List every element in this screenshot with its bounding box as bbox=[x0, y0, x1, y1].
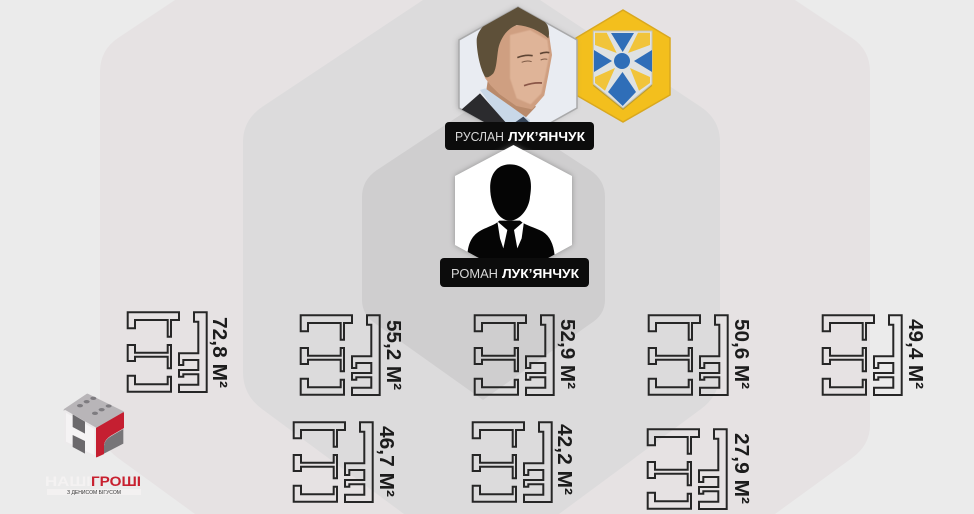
portrait: Ruslan Lukianchuk bbox=[455, 6, 578, 122]
apartment: 55,2 m2 bbox=[301, 315, 404, 395]
shield bbox=[593, 31, 652, 110]
brows and mouth bbox=[517, 52, 549, 58]
jacket bbox=[462, 93, 506, 122]
apartment: 72,8 m2 bbox=[128, 312, 230, 392]
apartment: 46,7 m2: 46,7 М² bbox=[375, 426, 397, 497]
logo subtitle band bbox=[47, 489, 141, 495]
tie bbox=[515, 117, 529, 122]
face bbox=[481, 26, 551, 108]
apartment: 49,4 m2 bbox=[823, 315, 926, 395]
apartment: 49,4 m2: 49,4 М² bbox=[904, 319, 926, 389]
logo: Nashi Groshi: ГРОШІ bbox=[91, 473, 141, 489]
logo wordmark: НАШІ bbox=[45, 473, 91, 489]
logo cube bbox=[65, 395, 123, 457]
shirt bbox=[480, 88, 530, 125]
apartment: 55,2 m2: 55,2 М² bbox=[382, 320, 404, 390]
emblem: yellow hexagon with shield bbox=[576, 10, 670, 122]
name label: Ruslan bbox=[445, 122, 594, 150]
apartment: 27,9 m2: 27,9 М² bbox=[730, 433, 752, 504]
apartment: 42,2 m2 bbox=[473, 422, 575, 502]
logo: Nashi Groshi bbox=[45, 395, 141, 496]
name label: Roman bbox=[440, 258, 589, 287]
background hexagon: middle bbox=[243, 0, 720, 514]
hair bbox=[477, 7, 549, 77]
logo: Nashi Groshi: З ДЕНИСОМ БІГУСОМ bbox=[67, 490, 121, 496]
apartment: 72,8 m2: 72,8 М² bbox=[208, 317, 230, 388]
background hexagon: inner bbox=[362, 100, 605, 400]
apartment: 27,9 m2 bbox=[648, 429, 752, 509]
name label: Ruslan: ЛУК’ЯНЧУК bbox=[508, 130, 585, 144]
name label: Roman: ЛУК’ЯНЧУК bbox=[502, 267, 579, 281]
portrait: anonymous silhouette bbox=[455, 145, 572, 277]
apartment: 52,9 m2 bbox=[475, 315, 578, 395]
apartment: 42,2 m2: 42,2 М² bbox=[553, 424, 575, 495]
apartment: 50,6 m2: 50,6 М² bbox=[730, 319, 752, 389]
neck bbox=[486, 81, 536, 117]
background hexagon: outer bbox=[100, 0, 870, 514]
name label: Roman: РОМАН bbox=[451, 267, 498, 281]
name label: Ruslan: РУСЛАН bbox=[455, 130, 504, 144]
apartment: 46,7 m2 bbox=[294, 422, 397, 502]
apartment: 50,6 m2 bbox=[649, 315, 752, 395]
apartment: 52,9 m2: 52,9 М² bbox=[556, 319, 578, 389]
